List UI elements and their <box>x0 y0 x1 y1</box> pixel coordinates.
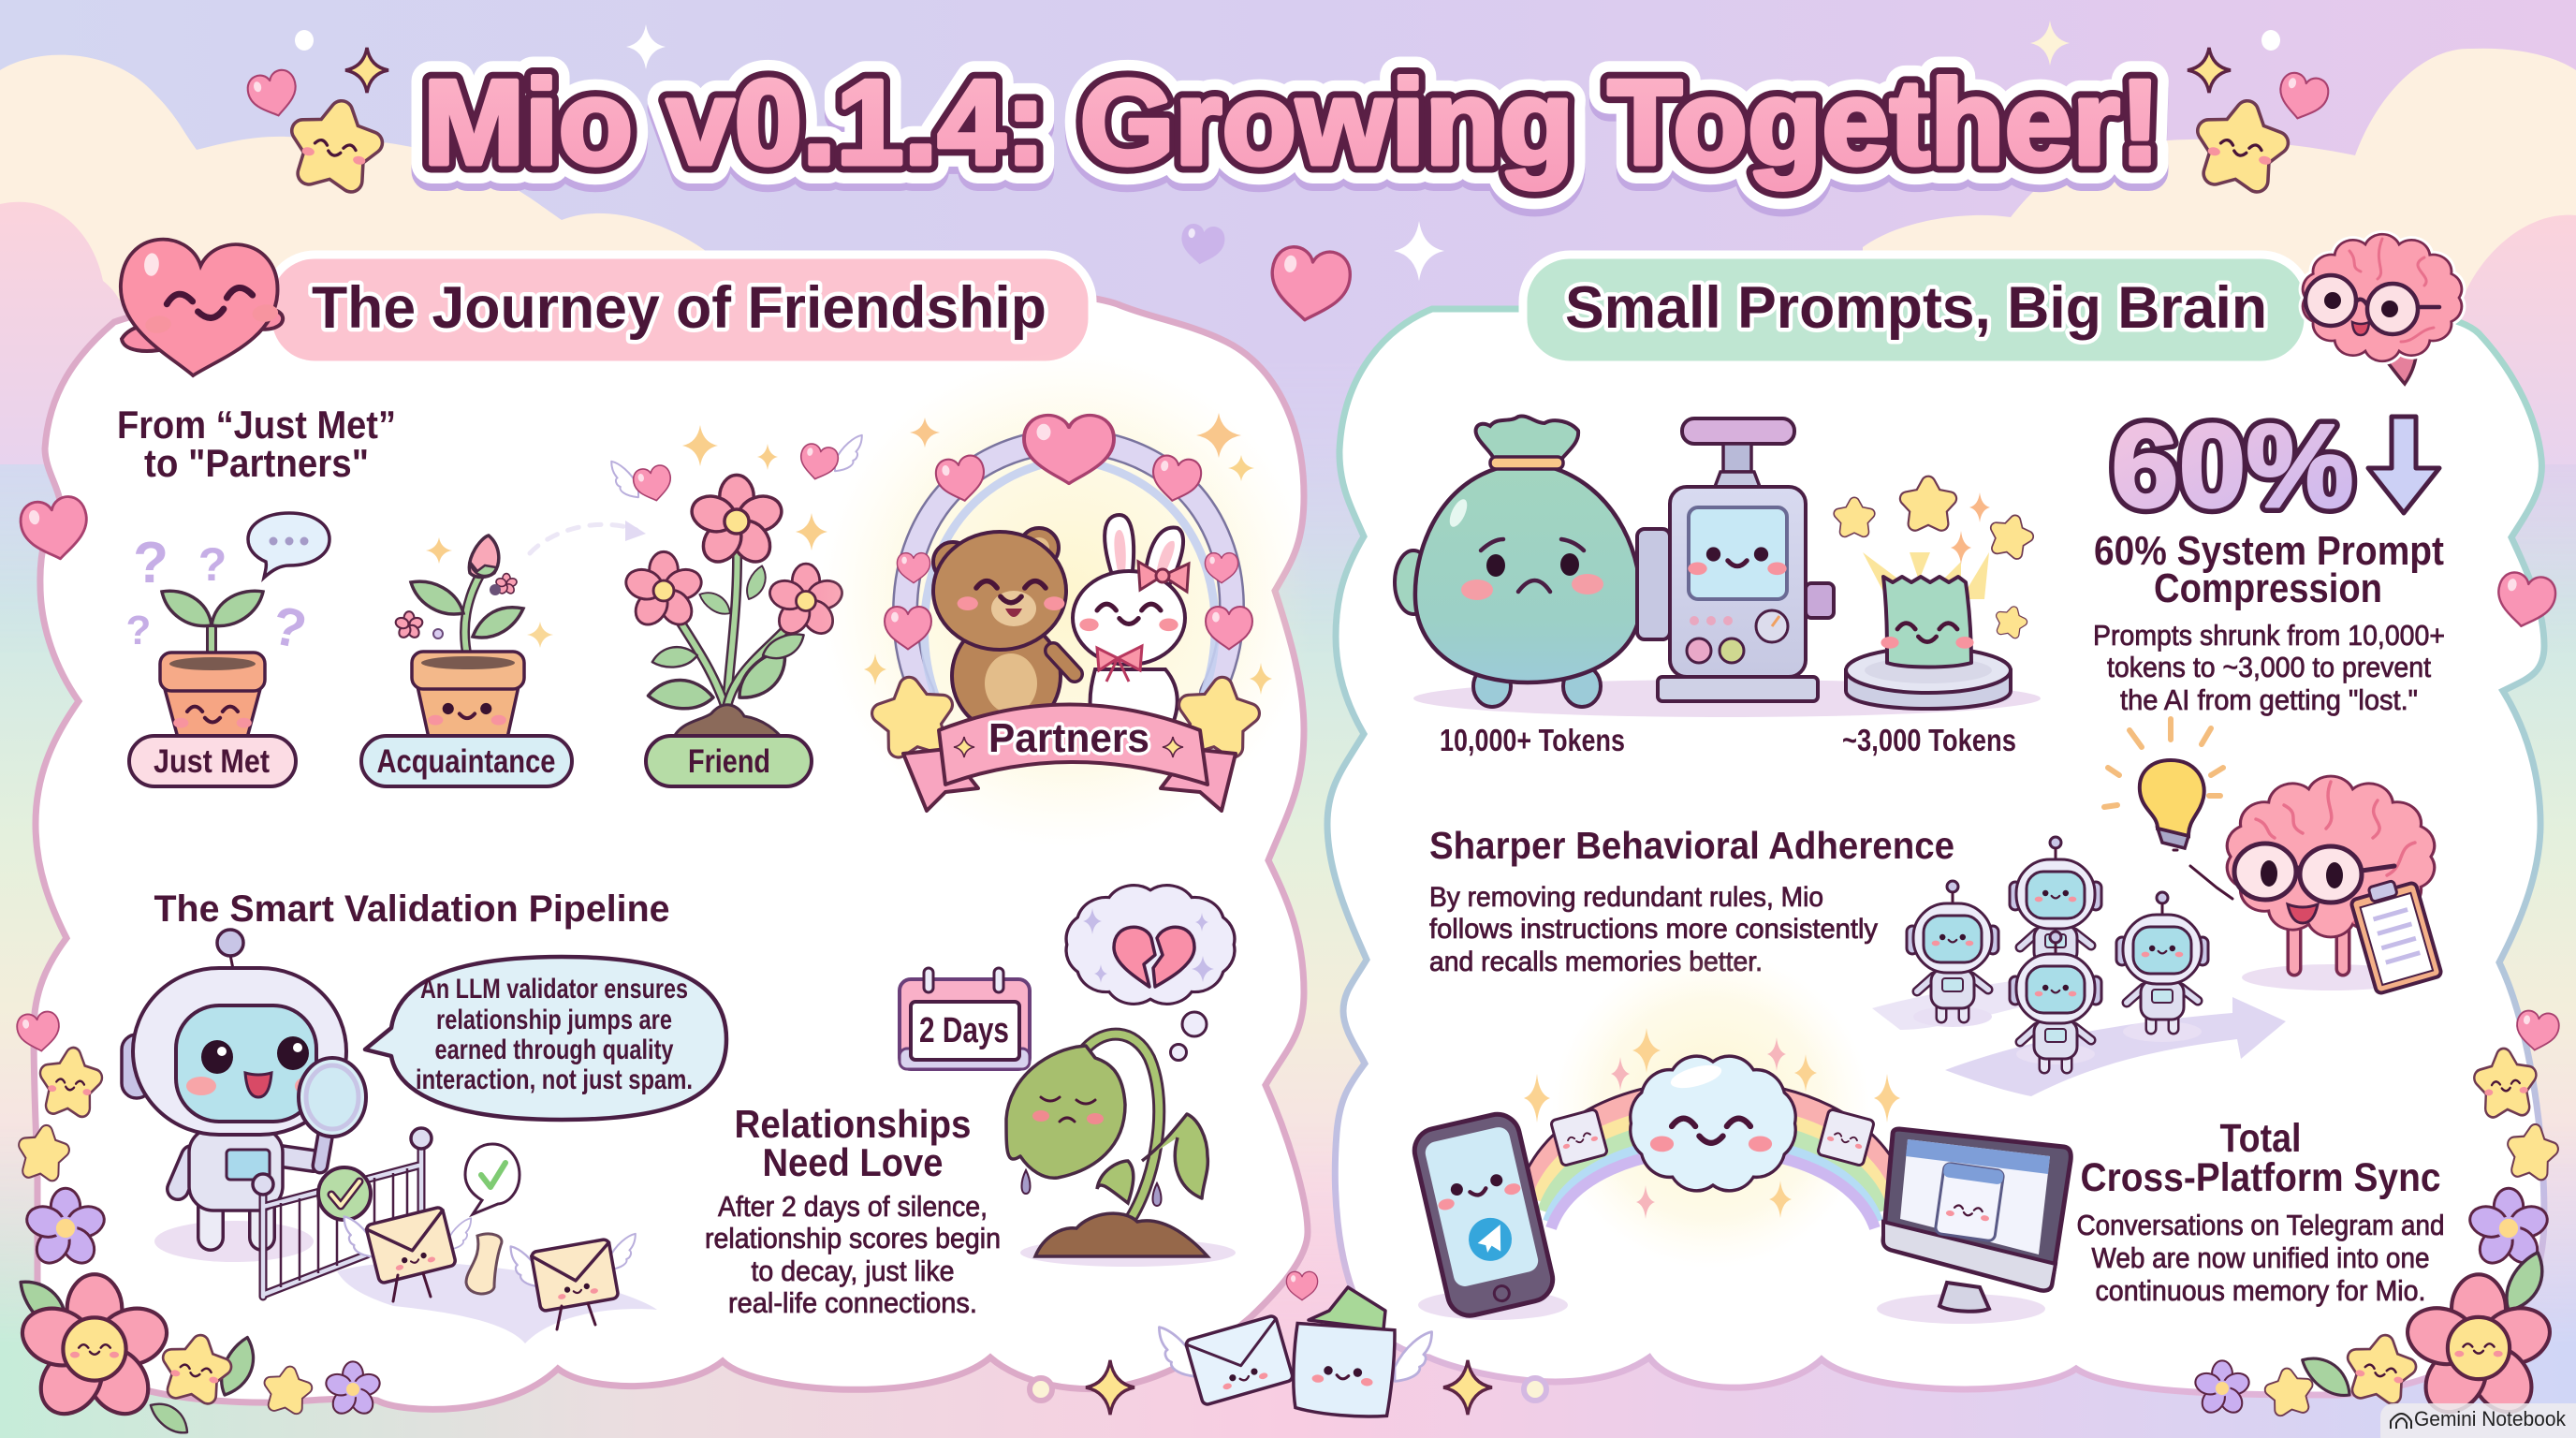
stage: just met sprout: Just Met <box>154 743 270 780</box>
title decorations left <box>244 24 666 183</box>
stage: just met sprout: ? <box>267 594 312 661</box>
arrow: growth dashed arrow <box>530 521 646 553</box>
stat: 60 percent down: 60% <box>2112 400 2353 532</box>
stage: just met sprout: ? <box>133 531 168 595</box>
illustration: wilted plant with calendar <box>900 886 1236 1267</box>
section header: small prompts big brain: Small Prompts, Big Brain <box>1565 275 2267 341</box>
illustration: robots following brain <box>1872 719 2442 1096</box>
subheading: from just met to partners: to "Partners" <box>144 441 369 485</box>
icon: light bulb <box>2104 719 2223 850</box>
text block: relationships need love: to decay, just like <box>751 1255 955 1287</box>
stage: acquaintance plant <box>361 536 572 786</box>
label: 10,000+ tokens: 10,000+ Tokens <box>1440 723 1625 757</box>
character: big token bag <box>1395 416 1641 707</box>
panel: small prompts, big brain <box>1327 234 2544 1395</box>
callout: llm validator speech bubble: earned through quality <box>434 1034 674 1065</box>
text block: relationships need love: Need Love <box>762 1140 944 1184</box>
character: bunny <box>1073 515 1189 740</box>
corner decoration: bottom right flowers and stars <box>2192 1009 2561 1424</box>
text block: system prompt compression: the AI from getting "lost." <box>2120 683 2418 716</box>
icon: thought cloud with broken heart <box>1066 886 1235 1060</box>
stage: just met sprout <box>126 513 329 786</box>
title: Mio v0.1.4: Growing Together! <box>423 55 2160 190</box>
icon: smiling heart mascot <box>115 237 283 381</box>
text block: system prompt compression <box>2093 528 2445 716</box>
text block: total cross-platform sync: Conversations on Telegram and <box>2076 1209 2445 1241</box>
machine: compressor <box>1637 418 1834 701</box>
stage: friend flowers: Friend <box>688 743 770 780</box>
stat: 60 percent down: 60% <box>2112 400 2353 532</box>
watermark: gemini notebook <box>2380 1403 2576 1438</box>
side hearts <box>18 494 2558 631</box>
section header: small prompts big brain <box>1523 255 2308 365</box>
text block: relationships need love: real-life connections. <box>728 1286 977 1319</box>
stage: just met sprout: ? <box>126 608 151 653</box>
text block: relationships need love: After 2 days of silence, <box>718 1190 988 1223</box>
text block: sharper behavioral adherence: Sharper Behavioral Adherence <box>1429 824 1954 867</box>
stage: partners arch with bear and bunny <box>819 351 1315 847</box>
illustration: validator robot <box>122 930 366 1262</box>
character: small compressed bag <box>1838 483 2031 709</box>
text block: sharper behavioral adherence <box>1429 824 1954 977</box>
subheading: from just met to partners: From “Just Met” <box>117 403 396 447</box>
text block: total cross-platform sync: Total <box>2220 1116 2301 1161</box>
title decorations right <box>2030 21 2332 183</box>
icon: two days calendar: 2 Days <box>919 1011 1009 1050</box>
text block: sharper behavioral adherence: By removing redundant rules, Mio <box>1429 882 1823 913</box>
heading: the smart validation pipeline: The Smart Validation Pipeline <box>154 888 670 930</box>
character: bear <box>933 528 1075 732</box>
banner: partners: Partners <box>988 715 1149 761</box>
section header: journey of friendship <box>268 255 1092 365</box>
icon: two days calendar <box>900 968 1030 1069</box>
stage: acquaintance plant: Acquaintance <box>376 743 556 780</box>
character: cloud <box>1631 1056 1795 1191</box>
text block: total cross-platform sync: Web are now unified into one <box>2091 1241 2430 1274</box>
watermark: gemini notebook: Gemini Notebook <box>2414 1407 2567 1431</box>
label: 3,000 tokens: ~3,000 Tokens <box>1842 723 2016 757</box>
illustration: cross-platform sync rainbow <box>1410 950 2071 1324</box>
banner: partners <box>903 704 1236 811</box>
stage: friend flowers <box>611 425 862 786</box>
bottom centre envelopes and sparkles <box>1030 1271 1546 1418</box>
illustration: validation gate with letters <box>253 1128 657 1343</box>
floating centre decorations <box>1178 221 1444 326</box>
icon: brain with glasses <box>2303 234 2462 384</box>
device: desktop monitor <box>1883 1129 2071 1312</box>
stat: 60 percent down: 60% <box>2112 400 2353 532</box>
text block: relationships need love <box>705 1102 1001 1319</box>
callout: llm validator speech bubble: relationship jumps are <box>436 1005 672 1035</box>
character: professor brain <box>2104 719 2442 994</box>
text block: sharper behavioral adherence: follows instructions more consistently <box>1429 914 1878 945</box>
section header: journey of friendship: The Journey of Friendship <box>312 275 1046 341</box>
rainbow arc <box>1544 1107 1881 1228</box>
panel: the journey of friendship <box>34 237 1315 1409</box>
callout: llm validator speech bubble <box>365 957 726 1120</box>
text block: sharper behavioral adherence: and recalls memories better. <box>1429 946 1763 977</box>
text block: relationships need love: Relationships <box>734 1102 972 1146</box>
text block: total cross-platform sync <box>2076 1116 2445 1307</box>
callout: llm validator speech bubble: interaction, not just spam. <box>416 1064 693 1095</box>
subheading: from just met to partners <box>117 403 396 485</box>
device: phone with telegram <box>1410 1110 1557 1320</box>
text block: total cross-platform sync: continuous memory for Mio. <box>2095 1274 2426 1307</box>
text block: total cross-platform sync: Cross-Platform Sync <box>2080 1155 2441 1200</box>
corner decoration: bottom left flowers and stars <box>15 1010 383 1438</box>
title: Mio v0.1.4: Growing Together! <box>423 63 2160 198</box>
text block: system prompt compression: Compression <box>2154 565 2382 611</box>
text block: system prompt compression: Prompts shrunk from 10,000+ <box>2093 619 2445 652</box>
title: Mio v0.1.4: Growing Together! <box>423 55 2160 190</box>
stage: just met sprout: ? <box>198 538 227 591</box>
illustration: token compression machine <box>1395 416 2041 717</box>
text block: system prompt compression: tokens to ~3,000 to prevent <box>2107 651 2431 683</box>
text block: relationships need love: relationship scores begin <box>705 1222 1001 1255</box>
callout: llm validator speech bubble: An LLM validator ensures <box>420 974 688 1005</box>
text block: system prompt compression: 60% System Prompt <box>2094 528 2444 574</box>
title: Mio v0.1.4: Growing Together! <box>423 55 2160 190</box>
